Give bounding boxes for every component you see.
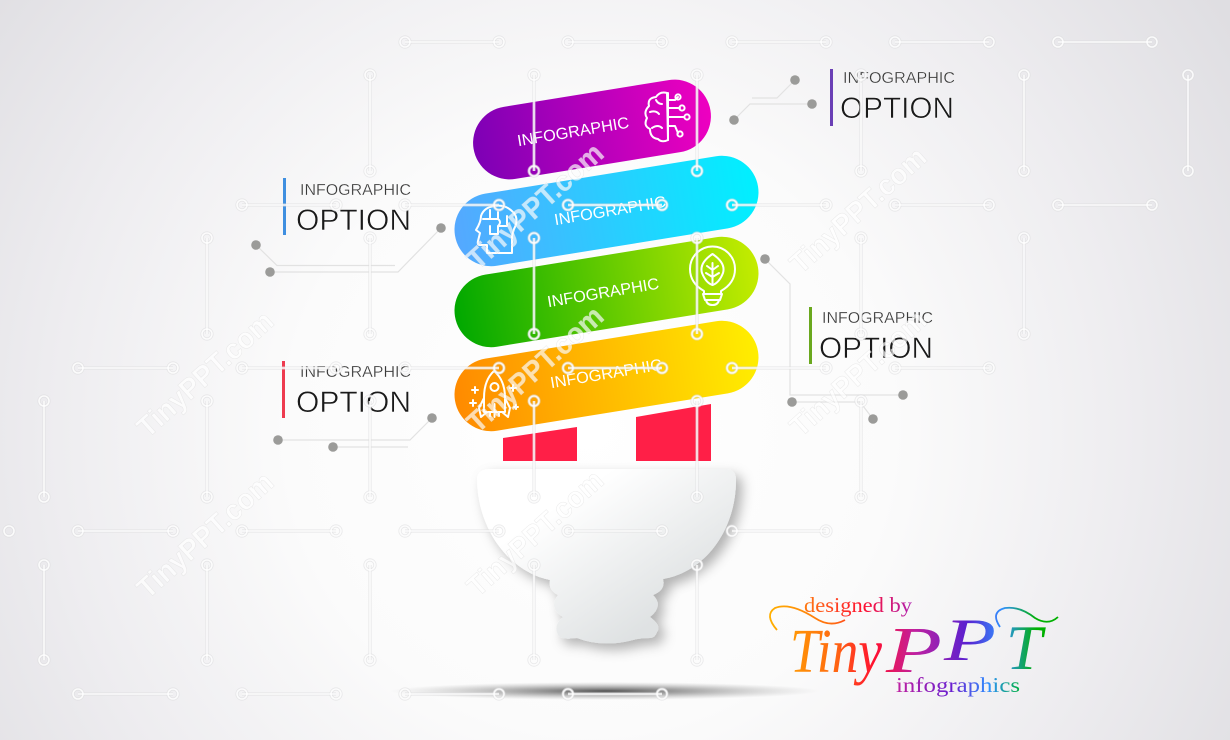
callout: green option: INFOGRAPHIC bbox=[822, 310, 933, 327]
logo: designed by TinyPPT infographics: infographics bbox=[896, 673, 1020, 697]
watermarks: TinyPPT.com bbox=[784, 304, 933, 443]
red connector right bbox=[636, 404, 711, 461]
logo: designed by TinyPPT infographics: designed by bbox=[804, 593, 913, 617]
callout: green option: OPTION bbox=[819, 332, 933, 365]
callout: purple option: OPTION bbox=[840, 92, 954, 125]
logo: designed by TinyPPT infographics bbox=[770, 593, 1058, 697]
bulb base bbox=[477, 469, 736, 644]
callout: red option: OPTION bbox=[296, 386, 411, 419]
connector wires and dots bbox=[251, 75, 908, 452]
callout: red option bbox=[282, 361, 411, 419]
logo: designed by TinyPPT infographics: P bbox=[943, 607, 996, 673]
callout: red option: INFOGRAPHIC bbox=[300, 364, 411, 381]
watermarks: TinyPPT.com bbox=[131, 305, 280, 444]
red connector left bbox=[503, 427, 577, 461]
pill: orange bbox=[449, 315, 764, 437]
ground shadow bbox=[390, 682, 820, 700]
watermarks: TinyPPT.com bbox=[461, 300, 610, 439]
callout: purple option: INFOGRAPHIC bbox=[843, 70, 955, 87]
icon: brain circuit bbox=[645, 92, 690, 141]
pill label: blue: INFOGRAPHIC bbox=[553, 194, 667, 229]
watermarks: TinyPPT.com bbox=[461, 464, 610, 603]
pill label: orange: INFOGRAPHIC bbox=[549, 357, 663, 392]
pill label: green: INFOGRAPHIC bbox=[546, 276, 660, 311]
pill: green bbox=[449, 231, 764, 353]
callout: blue option: OPTION bbox=[296, 204, 411, 237]
icon: puzzle head bbox=[476, 206, 516, 253]
pill: blue bbox=[449, 150, 764, 272]
callout: purple option bbox=[830, 69, 955, 126]
icon: rocket bbox=[470, 371, 518, 417]
watermarks: TinyPPT.com bbox=[131, 466, 280, 605]
callout: blue option bbox=[283, 178, 411, 237]
watermarks: TinyPPT.com bbox=[461, 137, 610, 276]
pill: purple bbox=[468, 74, 716, 185]
watermarks bbox=[131, 137, 933, 605]
logo: designed by TinyPPT infographics: T bbox=[1006, 612, 1046, 683]
pill label: purple: INFOGRAPHIC bbox=[516, 115, 630, 150]
logo: designed by TinyPPT infographics: P bbox=[885, 614, 942, 687]
callout: green option bbox=[809, 307, 933, 365]
callout: blue option: INFOGRAPHIC bbox=[300, 182, 411, 199]
icon: leaf bulb bbox=[690, 247, 735, 305]
watermarks: TinyPPT.com bbox=[784, 141, 933, 280]
logo: designed by TinyPPT infographics: Tiny bbox=[790, 618, 882, 686]
